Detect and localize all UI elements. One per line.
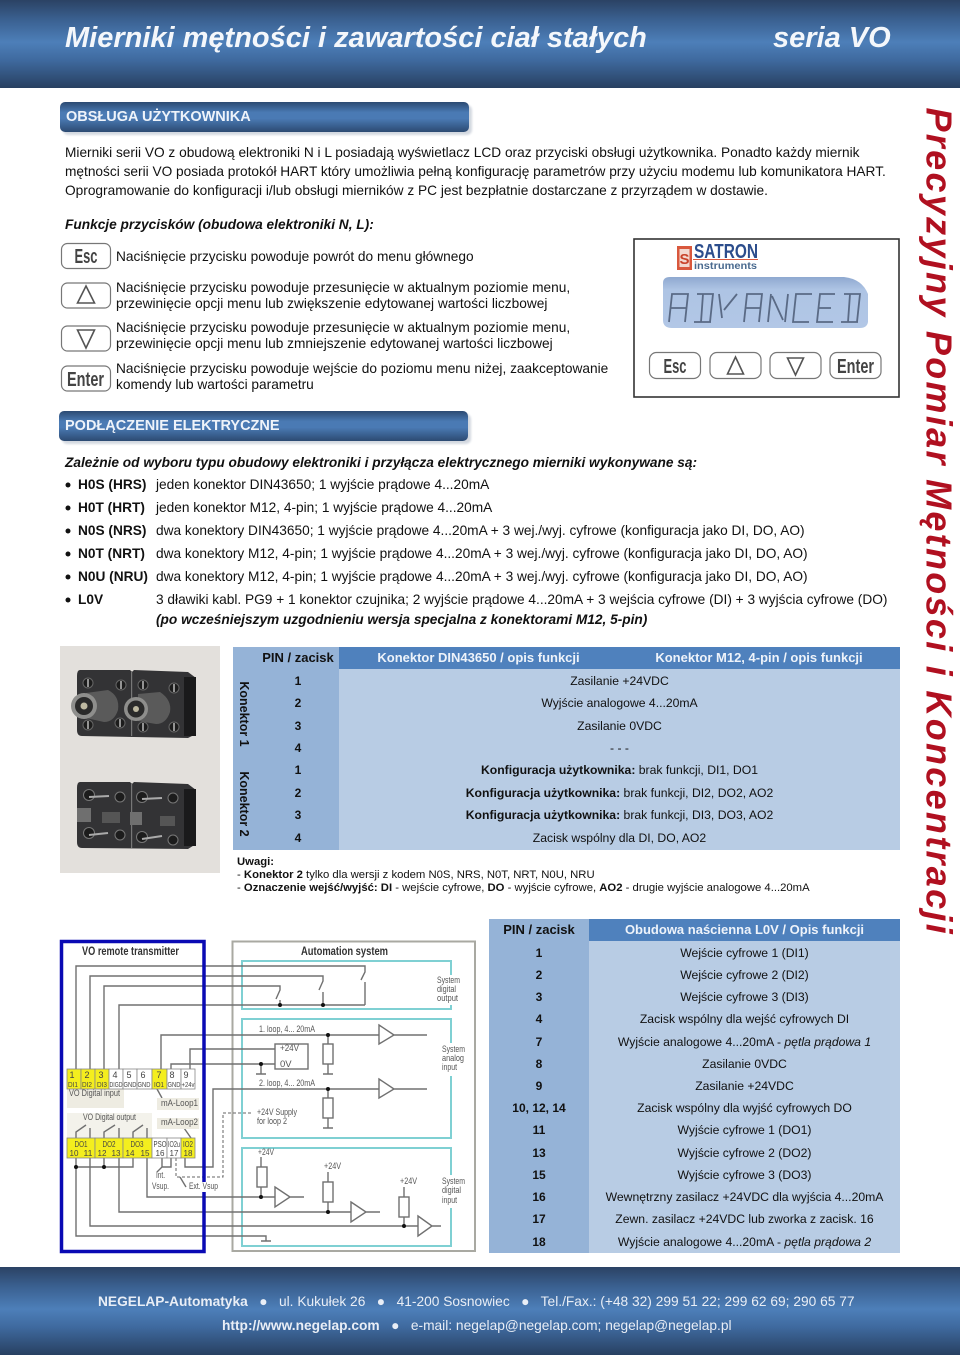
text: Enter function: Naciśnięcie przycisku powoduje wejście do poziomu menu niżej, zaakceptowanie (116, 361, 608, 376)
pin numbers: 1 (536, 946, 542, 960)
table header (339, 647, 900, 669)
automation labels: for loop 2 (257, 1116, 287, 1127)
terminal labels: 7 (156, 1070, 162, 1080)
terminal labels: IO1 (154, 1080, 164, 1089)
terminal labels: DO3 (130, 1139, 144, 1149)
text: up function: Naciśnięcie przycisku powoduje przesunięcie w aktualnym poziomie menu, (116, 280, 570, 295)
terminal block: digital inputs (67, 1069, 195, 1089)
icon: up key (60, 282, 112, 309)
table: wall housing pinout: Wyjście cyfrowe 2 (DO2) (678, 1146, 811, 1160)
text: Enter function (116, 361, 608, 392)
terminal labels: 8 (169, 1070, 175, 1080)
device keys: Esc (664, 356, 686, 378)
pin functions: Wejście cyfrowe 1 (DI1) (680, 946, 809, 960)
wiring diagram (60, 940, 476, 1254)
table: wall housing pinout (489, 919, 900, 1253)
table: wall housing pinout: 9 (536, 1079, 542, 1093)
automation labels: System (437, 975, 460, 986)
text: down function (116, 320, 570, 351)
terminal labels: PSO (154, 1139, 167, 1149)
automation labels (257, 946, 465, 1206)
automation labels: output (437, 993, 458, 1004)
table: connector pinout: Konektor 2 (237, 771, 251, 837)
transmitter labels (69, 946, 218, 1192)
list of housing variants: L0V (78, 592, 103, 607)
notes: Uwagi: (237, 856, 274, 868)
notes: - Konektor 2 tylko dla wersji z kodem N0S, NRS, N0T, NRT, N0U, NRU (237, 869, 595, 881)
icon: Esc key: Esc (74, 246, 98, 268)
list of housing variants: N0U (NRU) (78, 569, 148, 584)
header band (0, 0, 960, 88)
table: wall housing pinout: Zasilanie +24VDC (695, 1079, 794, 1093)
list of housing variants: H0S (HRS) (78, 477, 146, 492)
icon: Esc key (60, 242, 112, 270)
table: wall housing pinout: Zacisk wspólny dla wejść cyfrowych DI (640, 1012, 849, 1026)
transmitter labels: Ext. Vsup (189, 1181, 218, 1192)
terminal labels: IO2 (183, 1140, 193, 1149)
terminal labels: 9 (183, 1070, 189, 1080)
list of housing variants: N0S (NRS) (78, 523, 146, 538)
terminal labels: DI1 (68, 1080, 78, 1089)
automation labels: Automation system (301, 946, 388, 958)
automation labels: analog (442, 1053, 464, 1064)
terminal labels: 1 (69, 1070, 75, 1080)
automation labels: 2. loop, 4... 20mA (259, 1078, 315, 1089)
table: wall housing pinout: Obudowa naścienna L0V / Opis funkcji (625, 922, 864, 937)
series label: seria VO (773, 22, 891, 54)
table: wall housing pinout: 16 (532, 1190, 546, 1204)
terminal labels: 18 (184, 1149, 193, 1158)
automation system frame (232, 942, 475, 1251)
table: wall housing pinout: Zacisk wspólny dla wyjść cyfrowych DO (637, 1101, 852, 1115)
table: wall housing pinout: 11 (533, 1123, 545, 1137)
list of housing variants: 3 dławiki kabl. PG9 + 1 konektor czujnika; 2 wyjście prądowe 4...20mA + 3 wejścia cyfrowe (DI) + 3 wyjścia cyfrowe (DO) (156, 592, 887, 607)
list of housing variants: dwa konektory M12, 4-pin; 1 wyjście prądowe 4...20mA + 3 wej./wyj. cyfrowe (konfiguracja jako DI, DO, AO) (156, 546, 808, 561)
LCD screen (663, 277, 868, 328)
table: connector pinout: 1 (295, 763, 301, 777)
terminal labels: 12 (98, 1149, 107, 1158)
pin column background (233, 647, 339, 850)
web line: http://www.negelap.com ● e-mail: negelap@negelap.com; negelap@negelap.pl (222, 1318, 732, 1333)
connector front (71, 670, 196, 738)
automation labels: +24V (324, 1161, 342, 1172)
table: connector pinout: - - - (610, 741, 629, 755)
logo: SATRON (694, 241, 758, 263)
list of housing variants: (po wcześniejszym uzgodnieniu wersja specjalna z konektorami M12, 5-pin) (156, 612, 647, 627)
terminal labels: IO2u (168, 1140, 180, 1149)
terminal labels: 13 (112, 1149, 121, 1158)
table header (589, 919, 900, 941)
table: connector pinout: Zasilanie 0VDC (577, 719, 662, 733)
table: connector pinout: Konfiguracja użytkownika: brak funkcji, DI3, DO3, AO2 (466, 808, 773, 822)
address line: NEGELAP-Automatyka ● ul. Kukułek 26 ● 41-200 Sosnowiec ● Tel./Fax.: (+48 32) 299 51 22; 299 62 69; 290 65 77 (98, 1294, 854, 1309)
table: wall housing pinout: PIN / zacisk (503, 922, 575, 937)
table: connector pinout: Konektor DIN43650 / opis funkcji (377, 650, 580, 665)
terminal labels: DO2 (102, 1139, 116, 1149)
pin numbers: 1 (295, 674, 301, 688)
transmitter labels: VO Digital input (69, 1088, 120, 1099)
list of housing variants: jeden konektor DIN43650; 1 wyjście prądowe 4...20mA (156, 477, 489, 492)
table: connector pinout: 3 (295, 719, 301, 733)
pin functions: Zasilanie +24VDC (570, 674, 669, 688)
table: connector pinout: Zacisk wspólny dla DI, DO, AO2 (533, 831, 706, 845)
terminal block: digital outputs (67, 1138, 195, 1158)
logo: S (680, 251, 690, 268)
automation labels: input (442, 1195, 457, 1206)
terminal labels: 15 (140, 1149, 150, 1158)
wiring (76, 966, 441, 1241)
terminal labels: GND (138, 1080, 151, 1089)
terminal labels: DIGD (110, 1080, 123, 1089)
table: wall housing pinout: 10, 12, 14 (512, 1101, 566, 1115)
terminal labels: 5 (126, 1070, 132, 1080)
automation labels: 0V (280, 1059, 292, 1070)
terminal labels (68, 1070, 195, 1158)
transmitter labels: Vsup. (152, 1181, 169, 1192)
terminal shading labels (67, 1089, 199, 1138)
table: wall housing pinout: Wyjście analogowe 4...20mA - pętla prądowa 1 (618, 1035, 871, 1049)
connector back (77, 782, 196, 849)
intro paragraph: mętności serii VO posiada protokół HART który umożliwia pełną konfigurację parametrów przy użyciu modemu lub komunikatora HART. (65, 164, 886, 179)
transmitter labels: mA-Loop2 (161, 1117, 198, 1128)
automation labels: +24V Supply (257, 1107, 297, 1118)
terminal labels: 16 (156, 1149, 165, 1158)
table: wall housing pinout: Wyjście cyfrowe 3 (DO3) (678, 1168, 811, 1182)
terminal labels: +24v (182, 1080, 195, 1089)
table: connector pinout: Konektor M12, 4-pin / opis funkcji (655, 650, 863, 665)
text: Esc function: Naciśnięcie przycisku powoduje powrót do menu głównego (116, 249, 474, 264)
terminal labels: DI2 (82, 1080, 92, 1089)
device keys: Enter (837, 356, 874, 378)
list of housing variants: jeden konektor M12, 4-pin; 1 wyjście prądowe 4...20mA (156, 500, 492, 515)
section heading: electrical connection (59, 411, 468, 441)
transmitter labels: mA-Loop1 (161, 1098, 198, 1109)
table: wall housing pinout: Wejście cyfrowe 2 (DI2) (680, 968, 809, 982)
connector photo (60, 646, 220, 873)
list of housing variants: dwa konektory DIN43650; 1 wyjście prądowe 4...20mA + 3 wej./wyj. cyfrowe (konfiguracja jako DI, DO, AO) (156, 523, 805, 538)
transmitter labels: VO remote transmitter (82, 946, 179, 958)
text: up function: przewinięcie opcji menu lub zwiększenie edytowanej wartości liczbowej (116, 296, 547, 311)
terminal labels: 17 (170, 1149, 179, 1158)
terminal labels: 3 (98, 1070, 104, 1080)
vertical slogan: Precyzyjny Pomiar Mętności i Koncentracji (918, 108, 960, 936)
intro paragraph: Oprogramowanie do konfiguracji i/lub obsługi mierników z PC jest bezpłatnie dostarczane z przyrządem w dostawie. (65, 183, 768, 198)
table: wall housing pinout: 8 (536, 1057, 542, 1071)
table: wall housing pinout: Wewnętrzny zasilacz +24VDC dla wyjścia 4...20mA (606, 1190, 883, 1204)
section heading: electrical connection: PODŁĄCZENIE ELEKTRYCZNE (65, 418, 280, 434)
intro paragraph (65, 145, 886, 198)
rotated connector labels: Konektor 1 (237, 681, 251, 747)
automation labels: 1. loop, 4... 20mA (259, 1024, 315, 1035)
section heading: user operation: OBSŁUGA UŻYTKOWNIKA (66, 109, 251, 125)
table: wall housing pinout: 4 (536, 1012, 542, 1026)
terminal labels: GND (168, 1080, 181, 1089)
text: down function: Naciśnięcie przycisku powoduje przesunięcie w aktualnym poziomie menu, (116, 320, 570, 335)
device keys (650, 352, 881, 378)
text: Enter function: komendy lub wartości parametru (116, 377, 314, 392)
automation labels: input (442, 1062, 457, 1073)
terminal labels: 14 (126, 1149, 135, 1158)
terminal labels: 11 (84, 1149, 93, 1158)
variants lead-in: Zależnie od wyboru typu obudowy elektroniki i przyłącza elektrycznego mierniki wykonywane są: (65, 455, 697, 470)
table: connector pinout: 2 (295, 786, 301, 800)
table: wall housing pinout: 17 (532, 1212, 546, 1226)
automation labels: +24V (280, 1043, 300, 1054)
junction dots (74, 1003, 406, 1228)
panel: display photo (633, 238, 900, 398)
logo: instruments (694, 261, 757, 272)
table: wall housing pinout: 18 (532, 1235, 546, 1249)
text: down function: przewinięcie opcji menu lub zmniejszenie edytowanej wartości liczbowej (116, 336, 553, 351)
output relay switches (76, 1125, 147, 1138)
icon: down key (60, 325, 112, 352)
list of housing variants: N0T (NRT) (78, 546, 145, 561)
terminal labels: 2 (84, 1070, 90, 1080)
table: connector pinout: 4 (295, 741, 301, 755)
automation labels: +24V (400, 1176, 418, 1187)
table: connector pinout (233, 647, 900, 850)
automation labels: digital (437, 984, 456, 995)
buttons heading: Funkcje przycisków (obudowa elektroniki N, L): (65, 217, 374, 232)
table: connector pinout: Wyjście analogowe 4...20mA (541, 696, 698, 710)
notes: - Oznaczenie wejść/wyjść: DI - wejście cyfrowe, DO - wyjście cyfrowe, AO2 - drugie wyjście analogowe 4...20mA (237, 882, 810, 894)
transmitter frame (62, 942, 204, 1252)
dashed supply line (176, 1113, 252, 1177)
title: Mierniki mętności i zawartości ciał stałych (65, 22, 647, 54)
table: connector pinout: 4 (295, 831, 301, 845)
table: connector pinout: PIN / zacisk (262, 650, 334, 665)
terminal labels: 10 (70, 1149, 79, 1158)
terminal labels: 6 (140, 1070, 146, 1080)
table: wall housing pinout: 2 (536, 968, 542, 982)
intro paragraph: Mierniki serii VO z obudową elektroniki N i L posiadają wyświetlacz LCD oraz przyciski obsługi użytkownika. Ponadto każdy miernik (65, 145, 859, 160)
table: connector pinout: 3 (295, 808, 301, 822)
transmitter labels: VO Digital output (83, 1112, 136, 1123)
terminal labels: DO1 (74, 1139, 88, 1149)
list of housing variants: H0T (HRT) (78, 500, 145, 515)
notes (237, 856, 810, 894)
table: wall housing pinout: 13 (532, 1146, 546, 1160)
terminal labels: 4 (112, 1070, 118, 1080)
terminal labels: GND (124, 1080, 137, 1089)
table: connector pinout: 2 (295, 696, 301, 710)
table: wall housing pinout: Wyjście analogowe 4...20mA - pętla prądowa 2 (618, 1235, 871, 1249)
automation labels: +24V (258, 1147, 274, 1158)
table: wall housing pinout: 15 (532, 1168, 546, 1182)
table: connector pinout: Konfiguracja użytkownika: brak funkcji, DI2, DO2, AO2 (466, 786, 773, 800)
section heading: user operation (60, 102, 469, 132)
terminal labels: DI3 (97, 1080, 107, 1089)
footer band (0, 1267, 960, 1355)
table: wall housing pinout: Wejście cyfrowe 3 (DI3) (680, 990, 809, 1004)
list of housing variants: dwa konektory M12, 4-pin; 1 wyjście prądowe 4...20mA + 3 wej./wyj. cyfrowe (konfiguracja jako DI, DO, AO) (156, 569, 808, 584)
automation labels: System (442, 1044, 465, 1055)
transmitter labels: Int. (156, 1170, 165, 1181)
text: up function (116, 280, 570, 311)
table: connector pinout: Konfiguracja użytkownika: brak funkcji, DI1, DO1 (481, 763, 758, 777)
list of housing variants (66, 477, 887, 627)
table: wall housing pinout: Wyjście cyfrowe 1 (DO1) (678, 1123, 811, 1137)
pin column background (489, 919, 589, 1253)
table: wall housing pinout: Zewn. zasilacz +24VDC lub zworka z zacisk. 16 (615, 1212, 874, 1226)
table: wall housing pinout: 3 (536, 990, 542, 1004)
automation labels: digital (442, 1185, 461, 1196)
table: wall housing pinout: 7 (536, 1035, 542, 1049)
logo (677, 241, 758, 272)
table: wall housing pinout: Zasilanie 0VDC (702, 1057, 787, 1071)
automation labels: System (442, 1176, 465, 1187)
